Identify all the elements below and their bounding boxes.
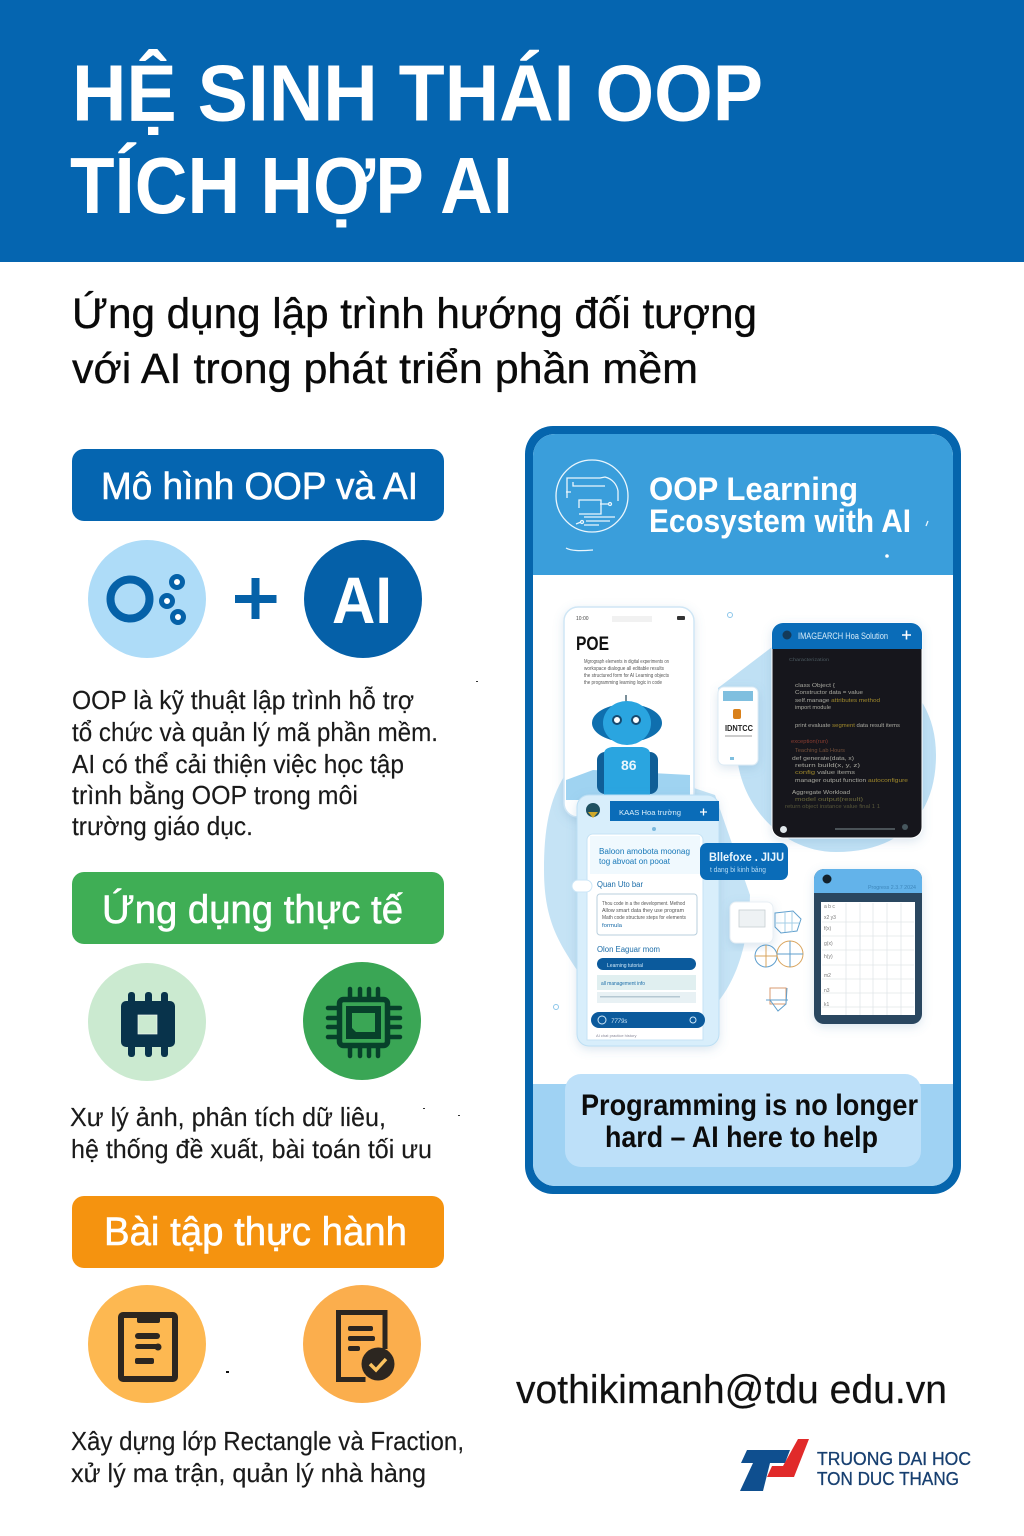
section: practical applications [70, 872, 460, 1164]
heading: Bài tập thực hành: Bài tập thực hành [104, 1210, 407, 1254]
heading: Mô hình OOP và AI: Mô hình OOP và AI [101, 466, 418, 508]
title: TÍCH HỢP AI [70, 141, 513, 230]
tablet: data grid: n3 [824, 988, 830, 994]
code lines: class Object { [795, 683, 835, 689]
panel header [556, 460, 928, 558]
code lines: print evaluate segment data result items [795, 723, 900, 729]
illustration: robot [592, 695, 662, 795]
caption box: hard – AI here to help [605, 1121, 878, 1154]
phone: practice chat: Math code structure steps for elements [602, 915, 686, 921]
phone: practice chat: Baloon amobota moonag [599, 847, 690, 856]
phone: robot lesson: 10:00 [576, 616, 589, 622]
panel title: OOP Learning [649, 471, 858, 507]
text block: applications [70, 1102, 432, 1164]
text block: exercises [71, 1426, 464, 1488]
subtitle [72, 290, 757, 393]
phone: practice chat: tog abvoat on pooat [599, 857, 671, 866]
small card: ID note [718, 687, 758, 765]
logo mark [740, 1439, 809, 1491]
panel: OOP learning ecosystem [525, 426, 961, 1194]
code lines: config value items [795, 770, 855, 776]
phone: practice chat: KAAS Hoa trường [619, 808, 681, 817]
code lines: import module [795, 705, 831, 711]
logo text: TRUONG DAI HOC [817, 1448, 971, 1469]
text block: OOP description: OOP là kỹ thuật lập trình hỗ trợ [72, 685, 414, 715]
code lines [785, 657, 908, 810]
illustration: robot: 86 [621, 757, 637, 773]
window: dark code editor [772, 623, 922, 838]
window: dark code editor: IMAGEARCH Hoa Solution [798, 631, 888, 641]
caption box [565, 1074, 921, 1167]
phone: practice chat: Thou code in a the development. Method [602, 901, 685, 907]
code lines: exception(run) [791, 739, 828, 745]
phone: practice chat: 7779s [611, 1019, 627, 1025]
university logo [740, 1439, 971, 1491]
caption box: Programming is no longer [581, 1089, 918, 1122]
phone: practice chat: Allow smart data they use program [602, 908, 684, 914]
subtitle: Ứng dụng lập trình hướng đối tượng [72, 290, 757, 338]
tablet: data grid: h(y) [824, 954, 833, 960]
panel title: Ecosystem with AI [649, 503, 911, 539]
phone: practice chat: Learning tutorial [607, 963, 643, 969]
mark: stray dot [476, 681, 478, 682]
callout: Bllefoxe: Bllefoxe . JIJU [709, 850, 784, 864]
phone: robot lesson: the structured form for AI Learning objects [584, 673, 669, 679]
heading: Mô hình OOP và AI [72, 449, 444, 521]
code lines: manager output function autoconfigure [795, 778, 908, 784]
mark: stray dot [226, 1371, 229, 1373]
icon: OOP objects [88, 540, 206, 658]
tablet: data grid [814, 869, 922, 1024]
code lines: self.manage attributes method [795, 698, 880, 704]
small card: ID note: IDNTCC [725, 724, 753, 733]
code lines: Teaching Lab Hours [795, 748, 845, 754]
text block: applications: Xư lý ảnh, phân tích dữ liêu, [70, 1102, 386, 1132]
tablet: data grid: Progress 2.3.7 2024 [868, 885, 916, 891]
icon: detailed chip [303, 962, 421, 1080]
code lines: Characterization [789, 657, 830, 662]
phone: practice chat: Olon Eaguar mom [597, 945, 660, 954]
phone: practice chat: Quan Uto bar [597, 880, 643, 889]
icon: simple chip [88, 963, 206, 1081]
phone: practice chat: formula [602, 923, 622, 929]
header banner [0, 0, 1024, 262]
phone: practice chat: AI chat practice history [596, 1033, 636, 1038]
phone: robot lesson: Mgrograph elements in digital experiments on [584, 659, 669, 665]
subtitle: với AI trong phát triển phần mềm [72, 345, 698, 393]
text block: OOP description: trình bằng OOP trong môi [72, 780, 358, 810]
phone: practice chat [572, 795, 719, 1046]
phone: robot lesson [564, 607, 694, 817]
text block: exercises: xử lý ma trận, quản lý nhà hàng [71, 1458, 426, 1488]
title [70, 48, 763, 230]
section: practice exercises [71, 1196, 464, 1488]
icon: AI circle: AI [332, 563, 392, 637]
phone: robot lesson: the programming learning logic in code [584, 680, 662, 686]
title: HỆ SINH THÁI OOP [72, 48, 763, 138]
text block: exercises: Xây dựng lớp Rectangle và Fraction, [71, 1426, 464, 1456]
code lines: return build(x, y, z) [795, 763, 860, 769]
icon: document with check [303, 1285, 421, 1403]
text block: applications: hệ thống đề xuất, bài toán tối ưu [71, 1134, 432, 1164]
section: OOP and AI model [72, 449, 478, 841]
callout: Bllefoxe [700, 843, 788, 880]
tablet: data grid: g(x) [824, 941, 833, 947]
phone: robot lesson: POE [576, 634, 609, 655]
marks: stray dots [423, 1108, 460, 1116]
tablet: data grid: x2 y3 [824, 915, 836, 921]
icon: plus [235, 578, 276, 619]
icon: AI circle [304, 540, 422, 658]
code lines: def generate(data, x) [792, 756, 854, 762]
code lines: return object instance value final 1 1 [785, 804, 880, 810]
phone: robot lesson: workspace dialogue all editable results [583, 666, 664, 672]
text block: OOP description: AI có thể cải thiện việc học tập [72, 749, 404, 779]
heading: Ứng dụng thực tế: Ứng dụng thực tế [102, 887, 403, 932]
tablet: data grid: f(x) [824, 926, 832, 932]
code lines: Aggregate Workload [792, 790, 850, 796]
small card and geometry sketches [730, 902, 803, 1011]
tablet: data grid: a b c [824, 904, 835, 910]
phone: practice chat: all management info [601, 981, 645, 987]
text block: OOP description: trường giáo dục. [72, 811, 253, 841]
heading: Bài tập thực hành [72, 1196, 444, 1268]
logo text [817, 1448, 971, 1489]
tablet: data grid: k1 [824, 1002, 830, 1008]
text block: OOP description [72, 685, 438, 841]
text block: OOP description: tổ chức và quản lý mã phần mềm. [72, 717, 438, 747]
contact email: vothikimanh@tdu edu.vn [516, 1368, 947, 1412]
callout: Bllefoxe: t dang bi kinh bảng [710, 867, 766, 874]
code lines: Constructor data = value [795, 690, 863, 696]
tablet: data grid: m2 [824, 973, 831, 979]
panel title [649, 471, 911, 539]
icon: clipboard [88, 1285, 206, 1403]
icon: circuit badge [556, 460, 928, 551]
background blobs [544, 644, 936, 1020]
code lines: model output(result) [795, 797, 863, 803]
heading: Ứng dụng thực tế [72, 872, 444, 944]
logo text: TON DUC THANG [817, 1468, 959, 1489]
